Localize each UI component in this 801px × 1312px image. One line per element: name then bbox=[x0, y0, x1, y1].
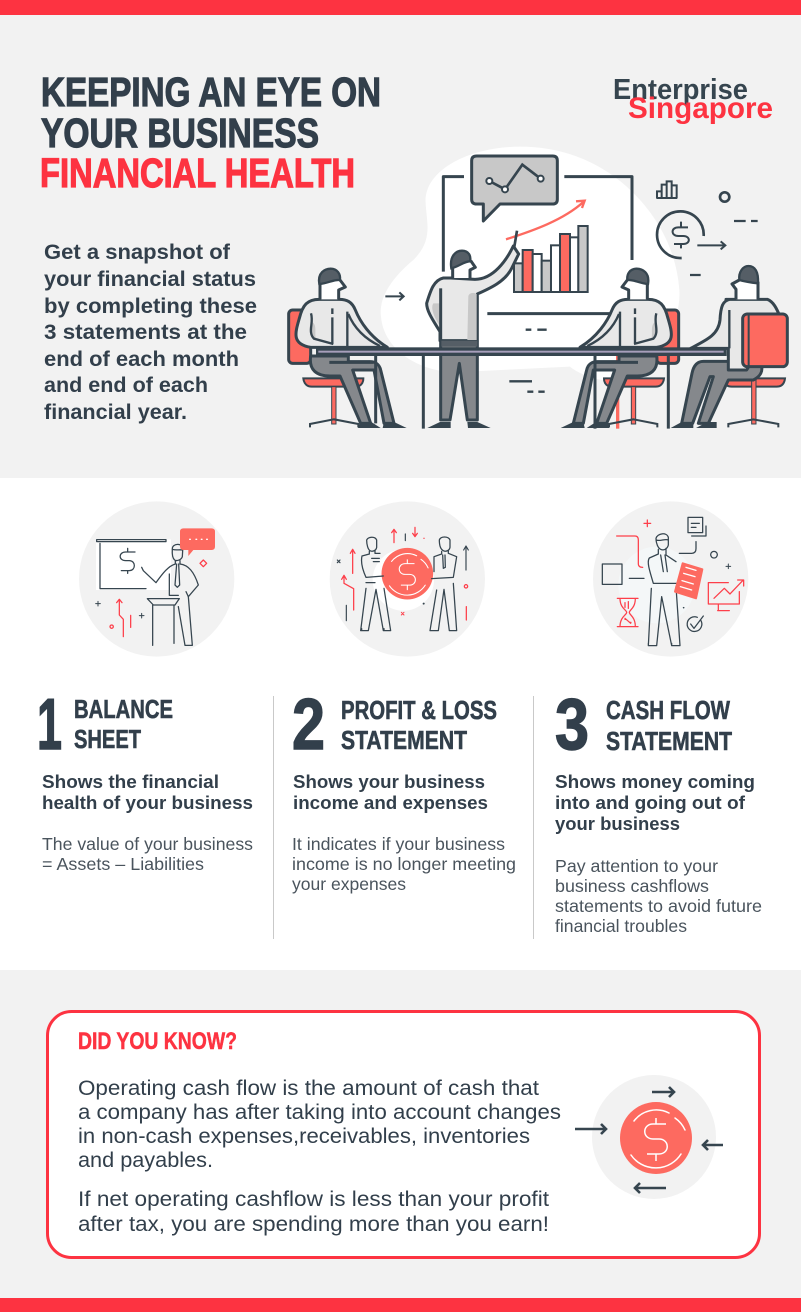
column 3: cash flow statement: into and going out of bbox=[555, 793, 746, 813]
column 3: cash flow statement: 3 bbox=[555, 685, 589, 765]
bar chart bbox=[514, 226, 588, 292]
title bbox=[40, 69, 381, 196]
title: KEEPING AN EYE ON bbox=[41, 69, 381, 115]
logo: Enterprise Singapore bbox=[613, 74, 773, 125]
column 1: balance sheet: 1 bbox=[37, 685, 62, 765]
intro text: 3 statements at the bbox=[44, 321, 247, 344]
intro text: by completing these bbox=[44, 295, 257, 318]
column 3: cash flow statement: statements to avoid future bbox=[555, 896, 762, 916]
callout text: in non-cash expenses,receivables, inventories bbox=[78, 1125, 530, 1148]
callout panel: did you know bbox=[48, 1012, 760, 1258]
bottom red bar bbox=[0, 1298, 801, 1312]
column 3: cash flow statement: financial troubles bbox=[555, 916, 687, 936]
speech bubble with line graph bbox=[472, 156, 557, 221]
column 2: profit and loss statement: PROFIT & LOSS bbox=[341, 695, 497, 725]
callout heading: DID YOU KNOW? bbox=[78, 1028, 237, 1055]
column 2: profit and loss statement: 2 bbox=[292, 685, 325, 765]
column 1: balance sheet: The value of your business bbox=[42, 834, 253, 854]
logo: Enterprise Singapore: Enterprise bbox=[613, 74, 748, 106]
icon: coin with cash flow arrows bbox=[575, 1075, 723, 1199]
title: FINANCIAL HEALTH bbox=[40, 150, 355, 196]
callout text: a company has after taking into account changes bbox=[78, 1101, 561, 1124]
seated person far right bbox=[671, 266, 787, 428]
presentation board bbox=[443, 177, 758, 392]
column 3: cash flow statement: Shows money coming bbox=[555, 772, 755, 792]
column 1: balance sheet: health of your business bbox=[42, 793, 253, 813]
intro text bbox=[44, 241, 257, 424]
column 1: balance sheet: SHEET bbox=[74, 724, 141, 754]
presenter bbox=[427, 231, 519, 428]
column 3: cash flow statement: Pay attention to your bbox=[555, 856, 718, 876]
callout text: and payables. bbox=[78, 1149, 213, 1172]
small icons: bars, circle, dollar, arrows bbox=[385, 181, 729, 300]
callout text: after tax, you are spending more than you earn! bbox=[78, 1213, 549, 1236]
intro text: and end of each bbox=[44, 374, 208, 397]
seated person left bbox=[289, 269, 407, 428]
column 1: balance sheet bbox=[37, 685, 253, 874]
column 1: balance sheet: Shows the financial bbox=[42, 772, 219, 792]
column 3: cash flow statement bbox=[555, 685, 762, 936]
logo: Enterprise Singapore: Singapore bbox=[628, 92, 773, 125]
hero illustration: business meeting bbox=[289, 147, 787, 429]
column 2: profit and loss statement: income and expenses bbox=[293, 793, 488, 813]
column dividers bbox=[273, 696, 534, 939]
circle icon 1: balance sheet presenter bbox=[79, 501, 234, 657]
intro text: end of each month bbox=[44, 348, 239, 371]
column 2: profit and loss statement: your expenses bbox=[292, 874, 406, 894]
title: YOUR BUSINESS bbox=[41, 110, 319, 156]
column 3: cash flow statement: your business bbox=[555, 814, 680, 834]
intro text: Get a snapshot of bbox=[44, 241, 231, 264]
column 2: profit and loss statement: STATEMENT bbox=[341, 725, 467, 755]
white blob backdrop bbox=[381, 147, 679, 381]
intro text: your financial status bbox=[44, 268, 256, 291]
callout text bbox=[78, 1077, 561, 1236]
intro text: financial year. bbox=[44, 401, 187, 424]
column 2: profit and loss statement: income is no longer meeting bbox=[292, 854, 516, 874]
callout text: If net operating cashflow is less than your profit bbox=[78, 1188, 549, 1211]
top red bar bbox=[0, 0, 801, 15]
column 3: cash flow statement: business cashflows bbox=[555, 876, 709, 896]
red growth arrow bbox=[506, 201, 585, 239]
circle icon 2: profit and loss, two people and coin bbox=[330, 501, 485, 657]
coral table support bbox=[616, 356, 619, 429]
table bbox=[316, 347, 727, 429]
column 3: cash flow statement: CASH FLOW bbox=[606, 695, 730, 725]
column 2: profit and loss statement: Shows your business bbox=[293, 772, 485, 792]
column 3: cash flow statement: STATEMENT bbox=[606, 726, 732, 756]
circle icon 3: cash flow, person with clipboard bbox=[593, 501, 748, 657]
seated person right bbox=[561, 269, 679, 428]
column 1: balance sheet: BALANCE bbox=[74, 694, 173, 724]
callout text: Operating cash flow is the amount of cash that bbox=[78, 1077, 539, 1100]
column 2: profit and loss statement bbox=[292, 685, 516, 894]
column 1: balance sheet: = Assets – Liabilities bbox=[42, 854, 204, 874]
column 2: profit and loss statement: It indicates if your business bbox=[292, 834, 505, 854]
